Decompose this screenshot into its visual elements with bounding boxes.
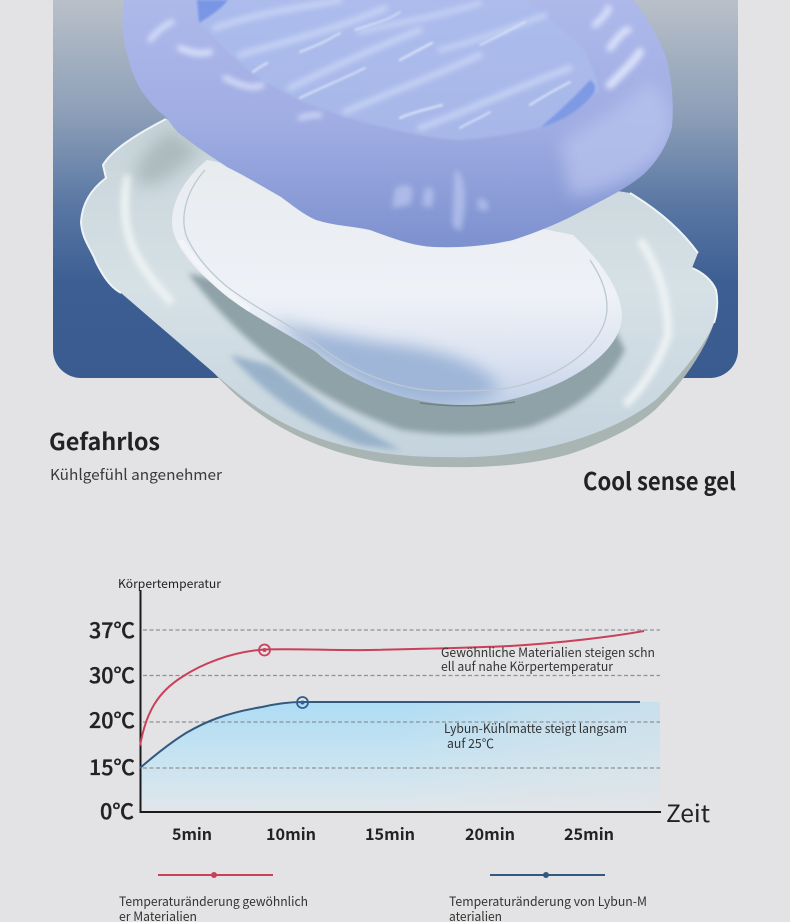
y axis labels: 30℃ bbox=[89, 660, 135, 690]
tray rim highlight bbox=[81, 119, 717, 323]
gel lower reflections bbox=[392, 170, 489, 232]
x axis labels: 20min bbox=[465, 821, 515, 845]
legend line blue bbox=[490, 872, 605, 878]
tray surface shading bbox=[125, 130, 668, 450]
tray underside lip bbox=[214, 323, 714, 467]
product: cooling tray bbox=[81, 119, 717, 467]
area fade bbox=[400, 702, 660, 812]
blue area under curve bbox=[140, 702, 660, 812]
floor crisp ripples bbox=[253, 12, 570, 128]
annotation: ordinary materials: ell auf nahe Körpertemperatur bbox=[441, 656, 613, 675]
legend text blue bbox=[449, 891, 647, 922]
gel rim highlights bbox=[150, 8, 640, 118]
floor soft ripples bbox=[215, 0, 570, 128]
x axis labels: 25min bbox=[564, 821, 614, 845]
y axis title: Körpertemperatur bbox=[118, 575, 221, 592]
legend: Lybun materials bbox=[449, 872, 647, 922]
pad dark contact shadow bbox=[420, 402, 515, 406]
gel right light side bbox=[560, 80, 672, 195]
annotation: Lybun mat: Lybun-Kühlmatte steigt langsam bbox=[444, 718, 627, 737]
legend text red bbox=[119, 891, 308, 922]
red curve: ordinary materials bbox=[140, 631, 644, 746]
floor dark corners bbox=[197, 0, 228, 23]
pad bright rim bbox=[242, 307, 250, 312]
light left band bbox=[125, 175, 172, 303]
x axis title: Zeit bbox=[666, 794, 710, 829]
y axis labels: 37℃ bbox=[89, 615, 135, 645]
panel: blue gradient backdrop bbox=[53, 0, 738, 378]
pad inner contour line bbox=[184, 170, 607, 391]
upper left grey bbox=[135, 130, 200, 185]
y axis labels: 20℃ bbox=[89, 705, 135, 735]
light right band bbox=[625, 240, 668, 405]
x axis labels: 15min bbox=[365, 821, 415, 845]
legend text blue: Temperaturänderung von Lybun-M bbox=[449, 891, 647, 910]
annotation: ordinary materials: Gewöhnliche Materialien steigen schn bbox=[441, 642, 655, 661]
gel inner floor bbox=[274, 84, 597, 140]
axes bbox=[140, 590, 661, 812]
legend: ordinary materials bbox=[119, 872, 308, 922]
gel shading and floor bbox=[150, 0, 672, 232]
x axis labels bbox=[172, 821, 614, 845]
red marker bbox=[259, 644, 270, 656]
legend line red bbox=[158, 872, 273, 878]
blue curve: Lybun material bbox=[140, 702, 640, 768]
label: Cool sense gel: Cool sense gel bbox=[583, 462, 736, 497]
blue marker bbox=[297, 697, 308, 708]
text: cooling sensation: Kühlgefühl angenehmer bbox=[50, 464, 222, 485]
y axis labels bbox=[89, 615, 135, 826]
pad shading bbox=[242, 307, 502, 405]
annotation: ordinary materials bbox=[441, 642, 655, 675]
legend text red: Temperaturänderung gewöhnlich bbox=[119, 891, 308, 910]
annotation: Lybun mat: auf 25℃ bbox=[447, 733, 494, 752]
dark well around pad bbox=[188, 273, 625, 434]
pad blue shadow bbox=[270, 320, 500, 405]
x axis labels: 10min bbox=[266, 821, 316, 845]
annotation: Lybun mat bbox=[444, 718, 627, 752]
product: blue gel cushion bbox=[122, 0, 673, 247]
y axis labels: 15℃ bbox=[89, 752, 135, 782]
dashed gridlines bbox=[143, 630, 660, 768]
tray top surface bbox=[81, 119, 717, 457]
x axis labels: 5min bbox=[172, 821, 212, 845]
gel outer body bbox=[122, 0, 673, 247]
y axis labels: 0℃ bbox=[100, 796, 134, 826]
chart: temperature over time bbox=[89, 575, 710, 845]
heading: Gefahrlos: Gefahrlos bbox=[49, 423, 160, 457]
white pad bbox=[172, 160, 622, 405]
bluish lower left band bbox=[230, 355, 400, 450]
